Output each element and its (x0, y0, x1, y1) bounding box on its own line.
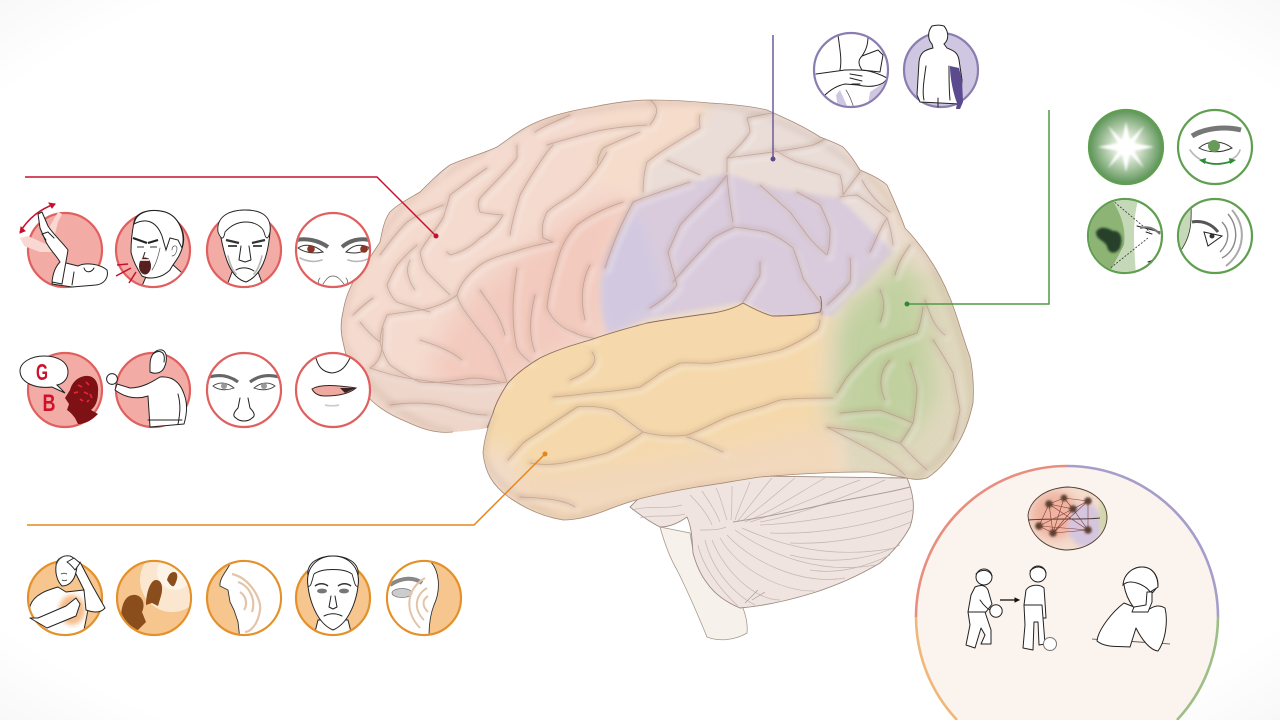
frontal deep pink (432, 201, 625, 383)
rim shading (342, 102, 973, 520)
boy with dropped ball (1023, 566, 1056, 650)
icon: eyes and nose (207, 353, 281, 427)
icon: silhouettes in thought bubbles (116, 560, 192, 636)
occipital lobe (828, 255, 935, 445)
leader line: frontal lobe (25, 177, 438, 238)
temporal lower pale (513, 431, 826, 520)
arrow between boys (1000, 598, 1019, 602)
icon: mouth with tongue (296, 353, 370, 427)
leader line: parietal lobe (770, 35, 776, 162)
frontal peach top (590, 100, 703, 200)
gyri lines (353, 100, 960, 507)
lavender lower left (600, 250, 610, 301)
parietal upper (648, 104, 890, 245)
letter G: G (36, 359, 48, 385)
cerebrum colour regions (342, 100, 973, 520)
mini brain network (1028, 486, 1108, 550)
gyri shadows (353, 100, 960, 507)
temporal pole pale (484, 442, 520, 497)
cerebrum outline (341, 100, 973, 520)
brainstem (660, 527, 747, 640)
occipital base (846, 270, 973, 479)
icon: shouting man (116, 210, 190, 292)
frontal lobe (344, 112, 596, 376)
gyri highlights (356, 104, 963, 510)
cerebellum (630, 476, 913, 608)
icon: visual field defect (1088, 199, 1162, 275)
orbital frontal (456, 428, 486, 432)
icon: worried face (296, 556, 370, 636)
icon: gripped arm (814, 33, 888, 108)
icon: grimacing face (207, 210, 281, 288)
boy staring with head on hand (1092, 567, 1170, 651)
icon: eyes with red iris (296, 213, 370, 287)
icon: baby arching with moving legs (20, 203, 107, 287)
panel: network and absence seizures (916, 466, 1218, 720)
icon: eye with sideways arrow (1178, 110, 1252, 184)
icon: nose with sound waves (206, 560, 282, 636)
icon: man with raised fist (107, 350, 190, 427)
parietal lavender (602, 173, 893, 334)
panel ring (916, 466, 1218, 720)
brain illustration (320, 90, 990, 640)
icon: star flash (1089, 110, 1163, 184)
icon: man with hand on head and chest (28, 556, 105, 640)
leader line: occipital lobe (904, 110, 1049, 306)
lateral fissure line (487, 296, 822, 428)
leader line: temporal lobe (27, 452, 548, 525)
temporal lobe (484, 304, 838, 483)
letter B: B (42, 390, 56, 417)
icon: speech bubble with letters (20, 353, 102, 427)
icon: body with highlighted arm (904, 25, 978, 109)
icon: eye with concentric waves (1178, 199, 1252, 273)
icon: eye and ear with sound waves (385, 560, 461, 636)
boy holding ball (966, 569, 1002, 648)
